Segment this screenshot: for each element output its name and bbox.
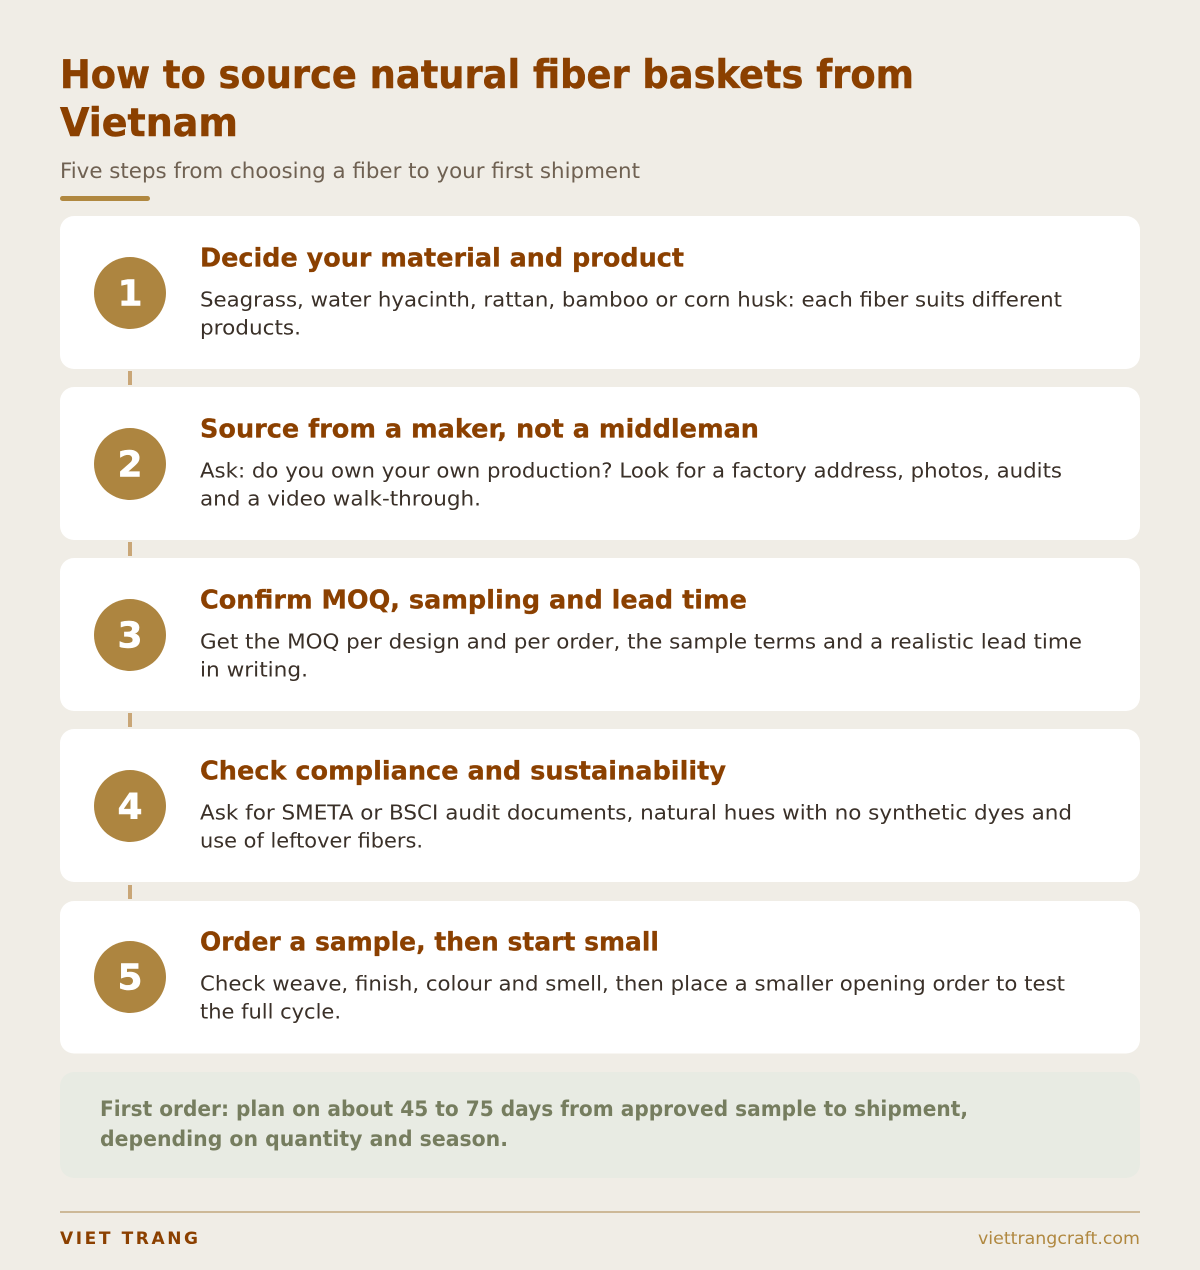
step 3 number badge (94, 599, 166, 671)
connector 3 to 4 (128, 713, 132, 727)
panel: step 3 (60, 558, 1140, 711)
step 2 number badge (94, 428, 166, 500)
step 1 description (200, 288, 1062, 340)
step 3 description: in writing. (200, 658, 308, 682)
step 2 description: and a video walk-through. (200, 486, 481, 510)
step 2 description: Ask: do you own your own production? Look for a factory address, photos, audits (200, 458, 1062, 482)
step 3 description: Get the MOQ per design and per order, the sample terms and a realistic lead time (200, 630, 1082, 654)
subtitle: Five steps from choosing a fiber to your first shipment (60, 159, 640, 183)
step 1 description: Seagrass, water hyacinth, rattan, bamboo or corn husk: each fiber suits different (200, 288, 1062, 312)
step 1 heading: Decide your material and product (200, 244, 684, 274)
panel: step 1 (60, 216, 1140, 369)
title accent rule (60, 196, 150, 201)
step 5 description (200, 972, 1065, 1024)
title (60, 53, 914, 146)
callout text: First order: plan on about 45 to 75 days from approved sample to shipment, (100, 1097, 968, 1121)
step 4 description: Ask for SMETA or BSCI audit documents, natural hues with no synthetic dyes and (200, 800, 1072, 824)
title: Vietnam (60, 101, 238, 146)
step 4 number badge: 4 (117, 786, 143, 828)
connector 1 to 2 (128, 371, 132, 385)
footer brand: VIET TRANG (60, 1229, 198, 1249)
step 4 heading: Check compliance and sustainability (200, 756, 726, 786)
step 3 number badge: 3 (117, 616, 143, 656)
step 4 description (200, 800, 1072, 852)
step 3 description (200, 630, 1082, 682)
panel: step 2 (60, 387, 1140, 540)
step 2 description (200, 458, 1062, 510)
callout text: depending on quantity and season. (100, 1127, 508, 1151)
callout text (100, 1097, 968, 1151)
step 4 number badge (94, 770, 166, 842)
step 5 number badge (94, 941, 166, 1013)
connector 2 to 3 (128, 542, 132, 556)
step 1 number badge (94, 257, 166, 329)
footer website: viettrangcraft.com (978, 1229, 1140, 1249)
step 3 heading: Confirm MOQ, sampling and lead time (200, 586, 747, 616)
step 5 heading: Order a sample, then start small (200, 928, 659, 958)
step 4 description: use of leftover fibers. (200, 828, 423, 852)
step 2 number badge: 2 (117, 444, 143, 486)
step 5 number badge: 5 (117, 958, 143, 998)
step 1 number badge: 1 (117, 274, 143, 314)
panel: step 5 (60, 901, 1140, 1054)
step 5 description: the full cycle. (200, 1000, 341, 1024)
callout: first order timing (60, 1072, 1140, 1178)
step 5 description: Check weave, finish, colour and smell, then place a smaller opening order to test (200, 972, 1065, 996)
step 2 heading: Source from a maker, not a middleman (200, 414, 759, 444)
step 1 description: products. (200, 316, 301, 340)
title: How to source natural fiber baskets from (60, 53, 914, 98)
connector 4 to 5 (128, 885, 132, 899)
panel: step 4 (60, 729, 1140, 882)
